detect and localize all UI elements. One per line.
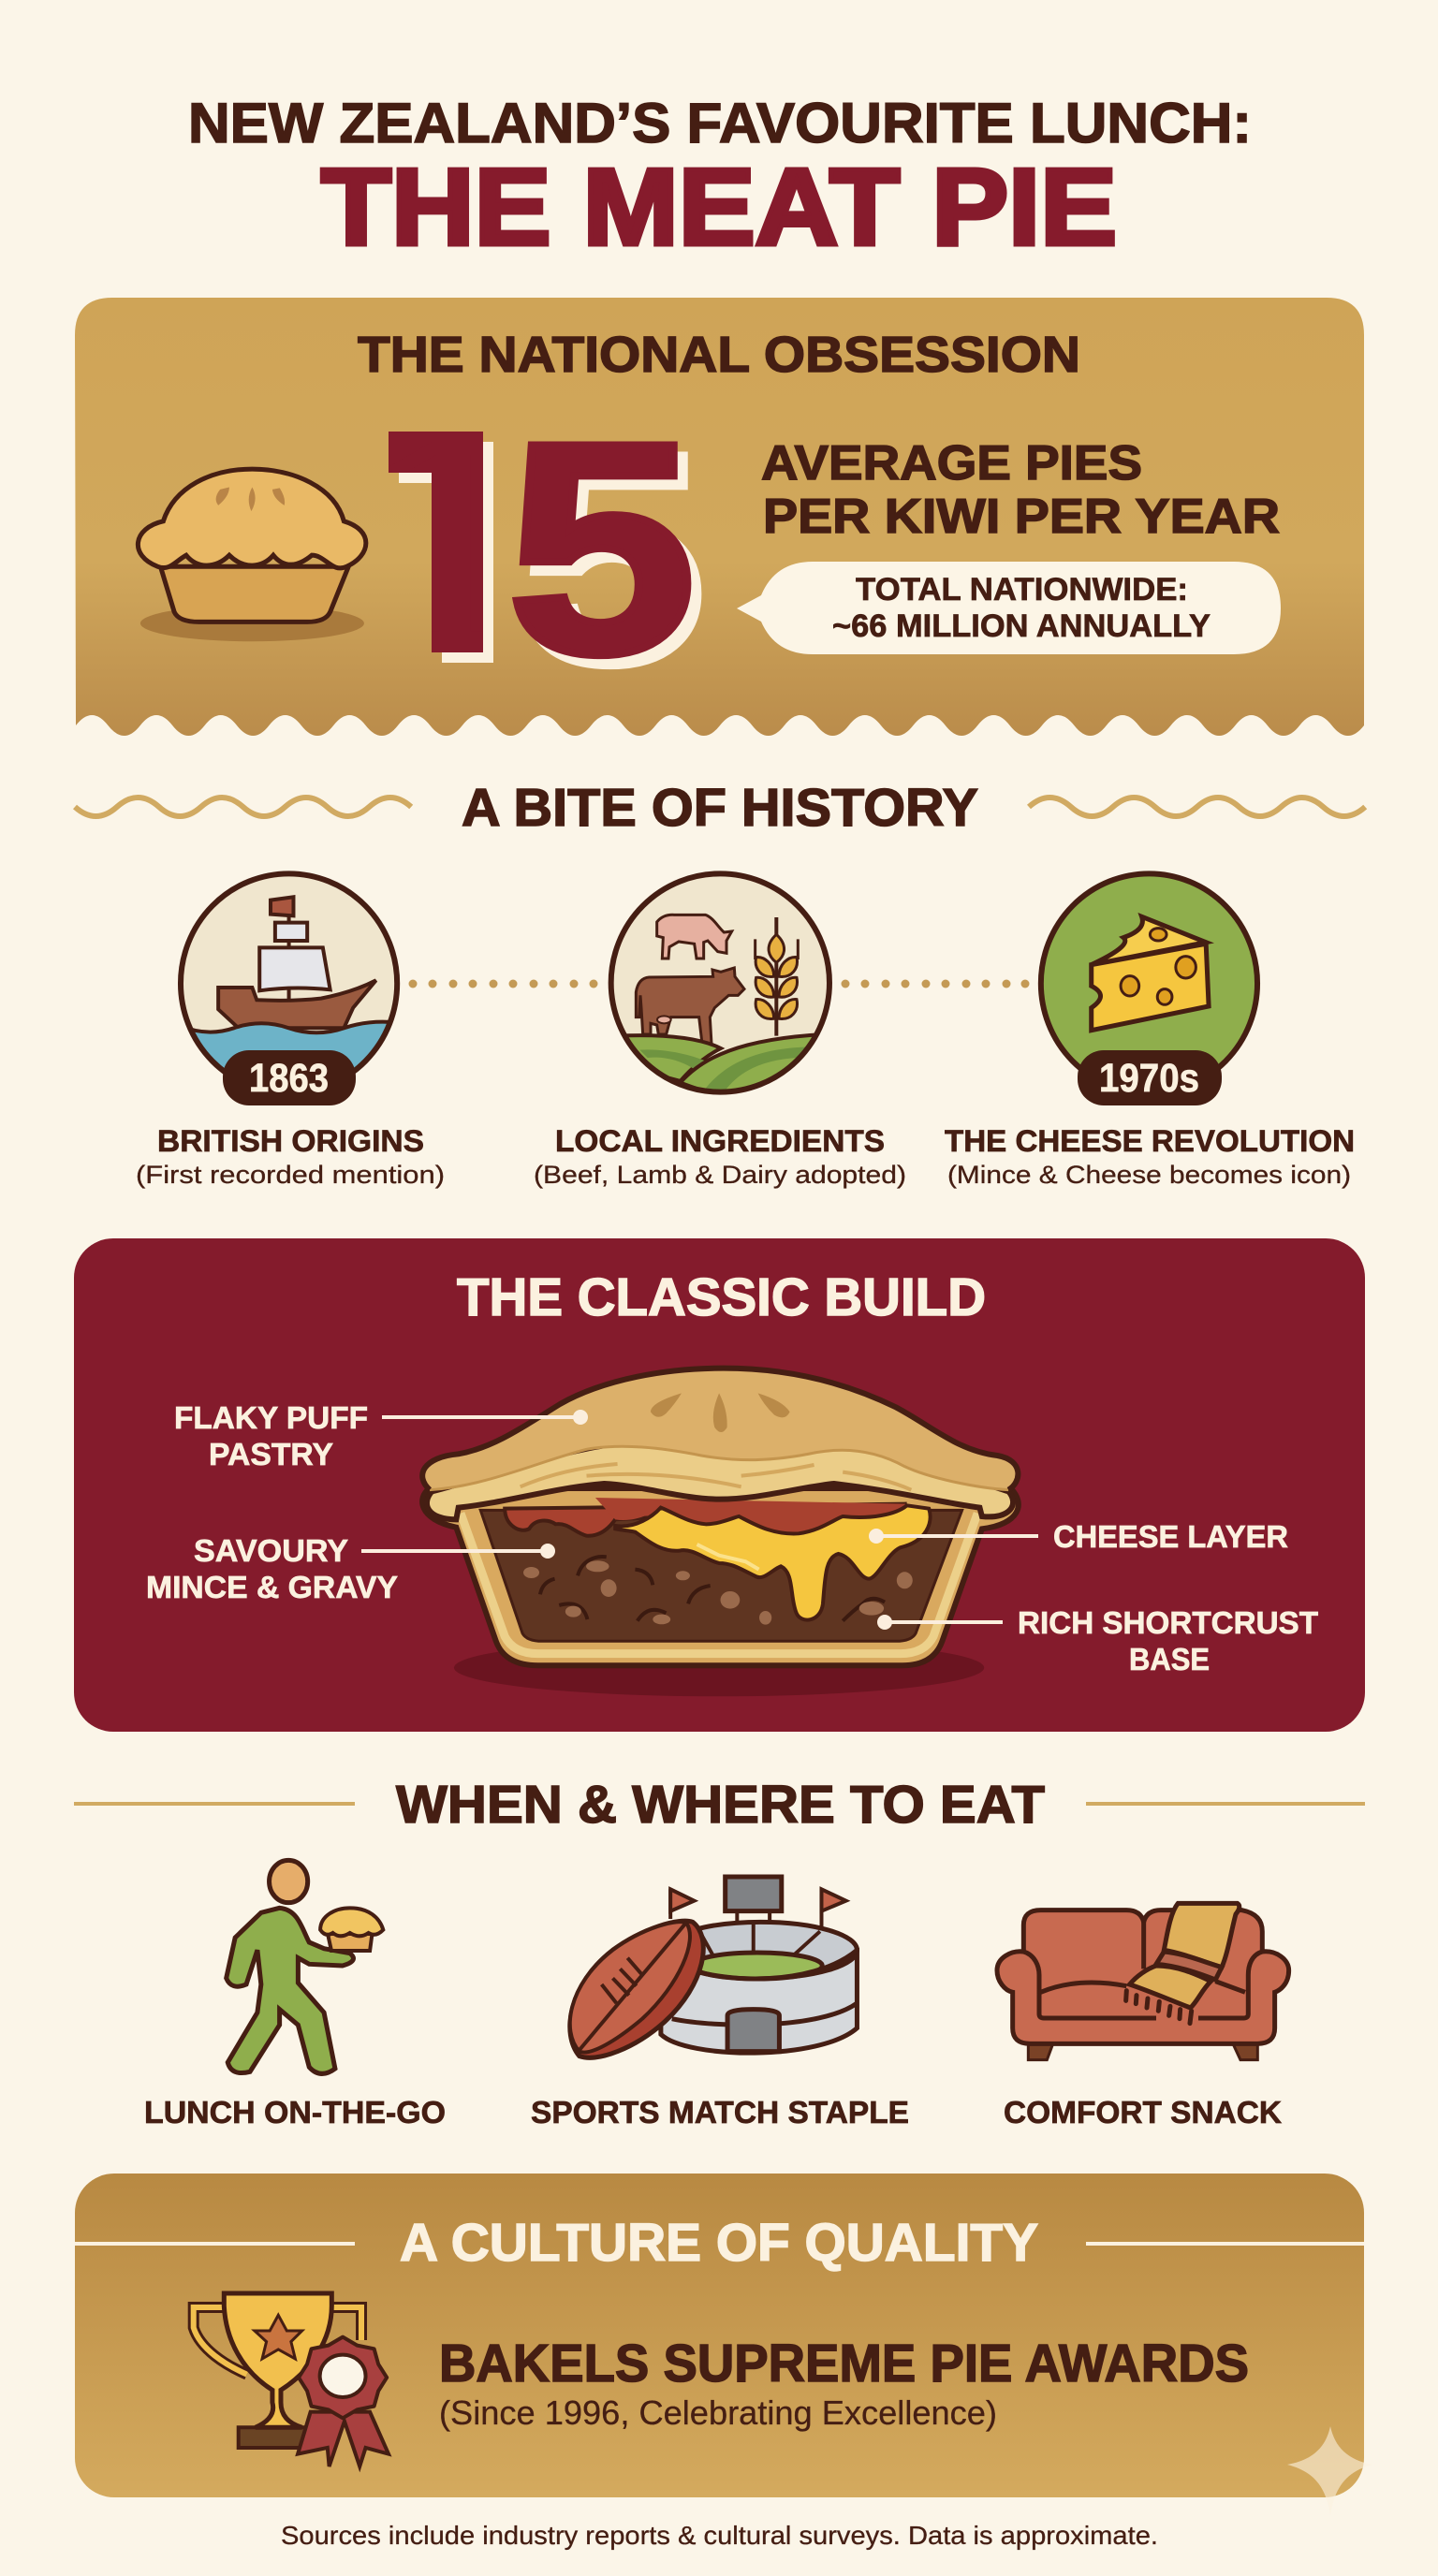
number shadow: 1: [365, 394, 550, 730]
year pill: 1970s: [1078, 1050, 1222, 1105]
heading: when and where to eat: WHEN & WHERE TO EAT: [396, 1775, 1045, 1835]
heading: a bite of history: [75, 778, 1365, 838]
callout: flaky puff pastry: PASTRY: [209, 1437, 333, 1471]
year pill: 1863: 1863: [249, 1056, 329, 1101]
title: [188, 92, 1252, 268]
icon label: comfort snack: COMFORT SNACK: [1004, 2095, 1282, 2130]
panel background: [74, 1238, 1365, 1732]
title line 2: THE MEAT PIE: [321, 146, 1117, 268]
callout: rich shortcrust base: BASE: [1129, 1642, 1210, 1676]
year pill: 1863: [223, 1050, 356, 1105]
average pies statement: PER KIWI PER YEAR: [763, 490, 1280, 544]
callout: savoury mince and gravy: [146, 1533, 555, 1604]
callout bubble: nationwide total: [737, 562, 1281, 654]
callout: cheese layer: CHEESE LAYER: [1053, 1519, 1288, 1554]
icon: cheese medallion: [1041, 873, 1257, 1093]
timeline label: british origins: BRITISH ORIGINS: [157, 1124, 424, 1158]
callout: savoury mince and gravy: SAVOURY: [194, 1533, 348, 1568]
timeline label: cheese revolution: (Mince & Cheese becomes icon): [947, 1161, 1351, 1189]
average pies statement: [761, 436, 1280, 544]
callout: rich shortcrust base: RICH SHORTCRUST: [1018, 1605, 1318, 1640]
timeline label: local ingredients: LOCAL INGREDIENTS: [555, 1124, 885, 1158]
timeline label: cheese revolution: THE CHEESE REVOLUTION: [945, 1124, 1355, 1158]
callout bubble: nationwide total: ~66 MILLION ANNUALLY: [832, 608, 1211, 644]
icon: trophy and rosette: [194, 2293, 389, 2466]
icon: person walking with pie: [227, 1860, 383, 2073]
timeline label: local ingredients: (Beef, Lamb & Dairy adopted): [534, 1161, 906, 1189]
number face: 1: [355, 384, 539, 720]
panel heading with rules: A CULTURE OF QUALITY: [400, 2213, 1038, 2273]
icon: football and stadium: [570, 1877, 857, 2057]
callout: flaky puff pastry: FLAKY PUFF: [174, 1400, 368, 1435]
number shadow: 5: [517, 391, 707, 727]
cross-section pie illustration: [422, 1368, 1019, 1696]
footer sources note: Sources include industry reports & cultural surveys. Data is approximate.: [281, 2521, 1158, 2550]
icon: pie: [138, 469, 366, 641]
icon: sofa with throw: [997, 1903, 1289, 2060]
year pill: 1970s: 1970s: [1099, 1056, 1199, 1101]
timeline label: cheese revolution: [945, 1124, 1355, 1189]
panel heading: THE NATIONAL OBSESSION: [358, 327, 1080, 383]
number shadow: [399, 442, 702, 670]
timeline label: british origins: (First recorded mention): [136, 1161, 445, 1189]
callout: savoury mince and gravy: MINCE & GRAVY: [146, 1570, 398, 1604]
panel: a culture of quality: [75, 2174, 1364, 2497]
callout: rich shortcrust base: [877, 1605, 1318, 1676]
award name: BAKELS SUPREME PIE AWARDS: [439, 2334, 1249, 2393]
number face: 5: [506, 381, 697, 717]
icon label: sports match staple: SPORTS MATCH STAPLE: [531, 2095, 909, 2130]
big number 15: [389, 432, 702, 670]
heading: a bite of history: A BITE OF HISTORY: [462, 778, 978, 838]
panel background: [75, 2174, 1364, 2497]
callout: flaky puff pastry: [174, 1400, 588, 1471]
award note: (Since 1996, Celebrating Excellence): [439, 2393, 997, 2432]
number face: [389, 432, 691, 659]
panel background with scalloped edge: [75, 298, 1364, 736]
average pies statement: AVERAGE PIES: [761, 436, 1142, 490]
panel: the national obsession: [75, 298, 1364, 736]
timeline dots: [408, 979, 1030, 988]
icon: livestock and wheat medallion: [611, 873, 829, 1095]
icon: sailing ship medallion: [179, 873, 404, 1095]
icon label: lunch on the go: LUNCH ON-THE-GO: [144, 2095, 446, 2130]
title line 1: NEW ZEALAND’S FAVOURITE LUNCH:: [188, 92, 1252, 154]
decorative sparkle mark: [1287, 2426, 1372, 2515]
timeline label: local ingredients: [534, 1124, 906, 1189]
callout bubble: nationwide total: TOTAL NATIONWIDE:: [856, 572, 1188, 607]
panel heading: THE CLASSIC BUILD: [457, 1267, 986, 1327]
timeline label: british origins: [136, 1124, 445, 1189]
callout: cheese layer: [869, 1519, 1288, 1554]
panel: the classic build: [74, 1238, 1365, 1732]
